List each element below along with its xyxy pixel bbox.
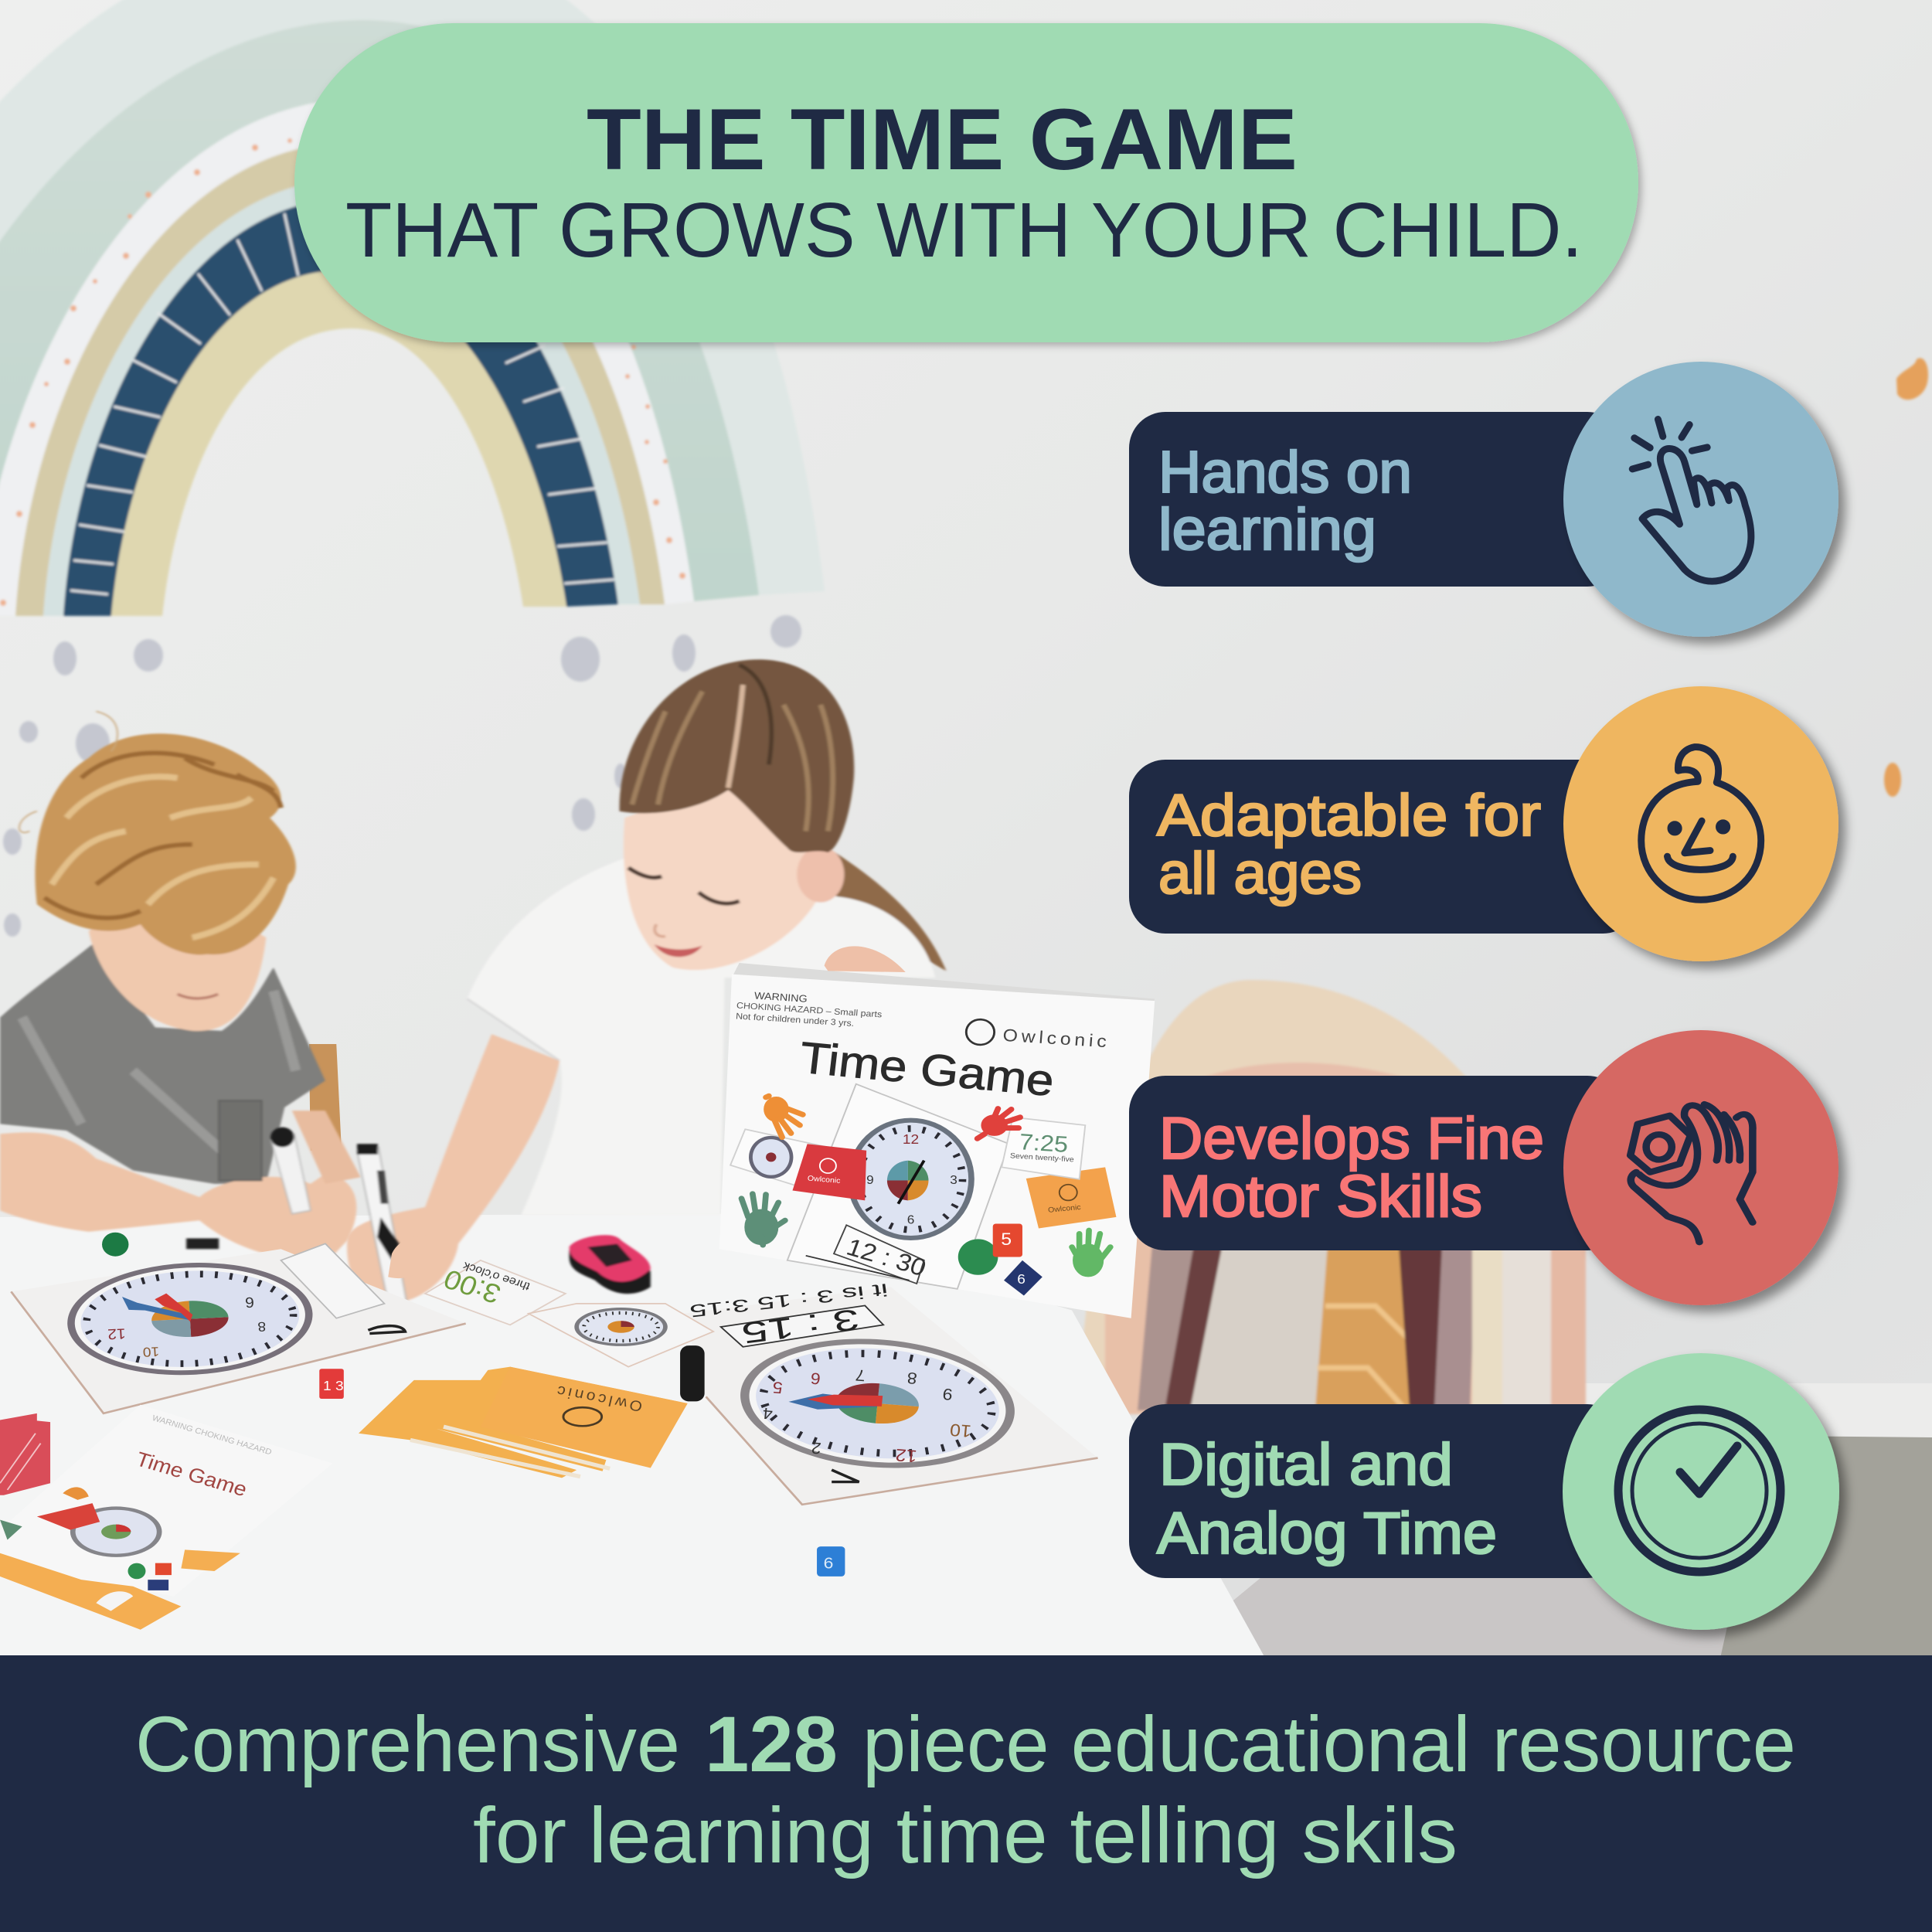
- box orange card: Owlconic: [1048, 1203, 1081, 1215]
- box dice: 5: [1001, 1230, 1012, 1250]
- label: learning: [1158, 497, 1376, 563]
- box board: [787, 1084, 1009, 1289]
- right board clock: 10: [949, 1420, 972, 1440]
- label: [1158, 440, 1412, 563]
- 3:00 time card: three o'clock: [461, 1259, 532, 1293]
- bottom banner: [0, 1655, 1932, 1932]
- wall rainbow decal: [0, 0, 825, 616]
- right board clock: 9: [942, 1385, 954, 1404]
- orange cards stack: Owlconic: [553, 1382, 644, 1414]
- feature 3: develops fine motor skills: [1129, 1030, 1838, 1305]
- label: [1157, 1432, 1497, 1566]
- Time Game product box: Not for children under 3 yrs.: [736, 1011, 855, 1029]
- box clock: 6: [907, 1213, 914, 1226]
- label: Motor Skills: [1159, 1164, 1482, 1230]
- table top: [0, 1214, 1264, 1656]
- chair: [309, 1044, 342, 1151]
- box time card 7:25: [1002, 1117, 1085, 1179]
- 3:00 time card: [425, 1259, 566, 1325]
- photo: children and game on the table: [0, 659, 1264, 1656]
- title pill: [294, 23, 1638, 342]
- feature 2: adaptable for all ages: [1129, 686, 1838, 961]
- right board clock: 7: [855, 1366, 866, 1385]
- wooden rainbow toy behind the table: [1078, 980, 1586, 1414]
- banner line 1: Comprehensive: [135, 1700, 680, 1788]
- box dice: 6: [1017, 1272, 1026, 1287]
- icon: hand holding nut: [1631, 1104, 1753, 1242]
- icon: child face: [1641, 747, 1761, 900]
- icon: clock with check: [1618, 1410, 1781, 1572]
- box clock: 3: [950, 1174, 957, 1187]
- label: Digital and: [1159, 1432, 1453, 1498]
- black marker cap: [680, 1345, 705, 1401]
- banner line 1: 128: [705, 1700, 838, 1788]
- girl's fingers over marker: [388, 1236, 454, 1278]
- box small clock card: [730, 1129, 828, 1189]
- blue die: 6: [824, 1554, 833, 1572]
- box board digital time: 12 : 30: [843, 1233, 930, 1281]
- box dice: [958, 1224, 1043, 1295]
- label: all ages: [1158, 841, 1362, 906]
- marker pens: [186, 1128, 408, 1325]
- label: Adaptable for: [1157, 783, 1541, 849]
- instruction booklet, lower left: WARNING CHOKING HAZARD: [151, 1413, 273, 1457]
- box time card 7:25: 7:25: [1019, 1129, 1069, 1158]
- box hand icons: [741, 1096, 1111, 1277]
- right board clock: 8: [906, 1369, 918, 1388]
- right board clock: 12: [895, 1444, 918, 1465]
- box clock: 9: [866, 1174, 874, 1187]
- instruction booklet, lower left: Time Game: [133, 1447, 250, 1501]
- box clock: 12: [903, 1132, 919, 1147]
- box board digital time: [806, 1225, 930, 1284]
- box title: Time Game: [798, 1032, 1056, 1105]
- box clock: [847, 1118, 975, 1240]
- right board clock: 2: [811, 1439, 822, 1458]
- feature 4: digital and analog time: [1129, 1353, 1839, 1630]
- label: [1159, 1106, 1544, 1230]
- blue die: [817, 1546, 845, 1577]
- left board clock: 12: [107, 1325, 126, 1342]
- right game board: 3 : 15: [740, 1302, 862, 1349]
- title line 2: THAT GROWS WITH YOUR CHILD.: [345, 187, 1583, 274]
- banner line 1: piece educational resource: [862, 1700, 1796, 1788]
- label: Analog Time: [1157, 1501, 1497, 1566]
- banner line 1: [135, 1700, 1796, 1788]
- label: Hands on: [1158, 440, 1412, 505]
- right game board: [684, 1279, 1098, 1505]
- label: [1157, 783, 1541, 906]
- left board clock: 6: [245, 1294, 254, 1310]
- right board clock: 4: [762, 1404, 774, 1423]
- right board clock: [734, 1329, 1021, 1478]
- red cards, lower left: [0, 1413, 50, 1495]
- icon: tapping hand: [1632, 419, 1751, 581]
- box time card 7:25: Seven twenty-five: [1009, 1152, 1075, 1164]
- left board clock: 8: [257, 1319, 267, 1334]
- Time Game product box: CHOKING HAZARD – Small parts: [736, 1000, 883, 1019]
- red die: [319, 1369, 344, 1399]
- left board clock: 10: [142, 1344, 160, 1359]
- title line 1: THE TIME GAME: [587, 91, 1298, 188]
- right board clock: 5: [772, 1378, 784, 1397]
- banner line 2: for learning time telling skils: [473, 1791, 1458, 1879]
- box red card: Owlconic: [807, 1175, 841, 1185]
- wall spots, orange: [1884, 358, 1928, 797]
- box red card: [792, 1144, 866, 1200]
- instruction booklet, lower left: [0, 1405, 332, 1630]
- 3:00 time card: 3:00: [440, 1264, 505, 1310]
- box logo: Owlconic: [1002, 1026, 1111, 1052]
- green die on table: [102, 1233, 128, 1257]
- boy: [0, 712, 361, 1264]
- box logo: [966, 1019, 1111, 1052]
- wall paint drops: [3, 615, 801, 937]
- orange cards stack: [359, 1367, 688, 1478]
- box orange card: [1026, 1167, 1116, 1229]
- label: Develops Fine: [1159, 1106, 1544, 1172]
- right board clock: 6: [810, 1369, 821, 1388]
- red/black eraser: [570, 1235, 651, 1294]
- Time Game product box: WARNING: [754, 990, 808, 1005]
- red die: 1 3: [323, 1379, 344, 1393]
- girl: [347, 659, 946, 1304]
- left board clock: [64, 1257, 316, 1380]
- Time Game product box: [719, 946, 1155, 1318]
- left game board: [11, 1243, 466, 1413]
- small clock card: [529, 1304, 713, 1367]
- right game board: it is 3 : 15 3:15: [689, 1279, 889, 1320]
- feature 1: hands on learning: [1129, 362, 1838, 637]
